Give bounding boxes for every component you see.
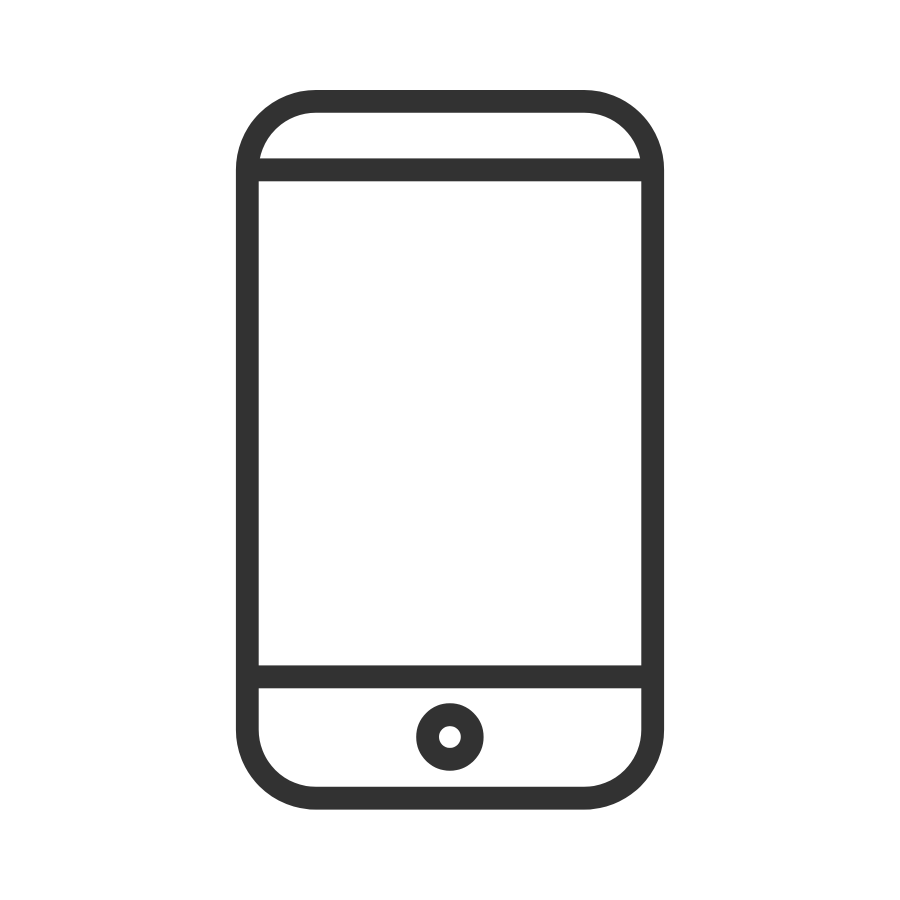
top bezel divider: [248, 158, 652, 181]
phone body outline: [247, 101, 653, 798]
home button: [428, 715, 472, 759]
bottom bezel divider: [248, 665, 652, 688]
